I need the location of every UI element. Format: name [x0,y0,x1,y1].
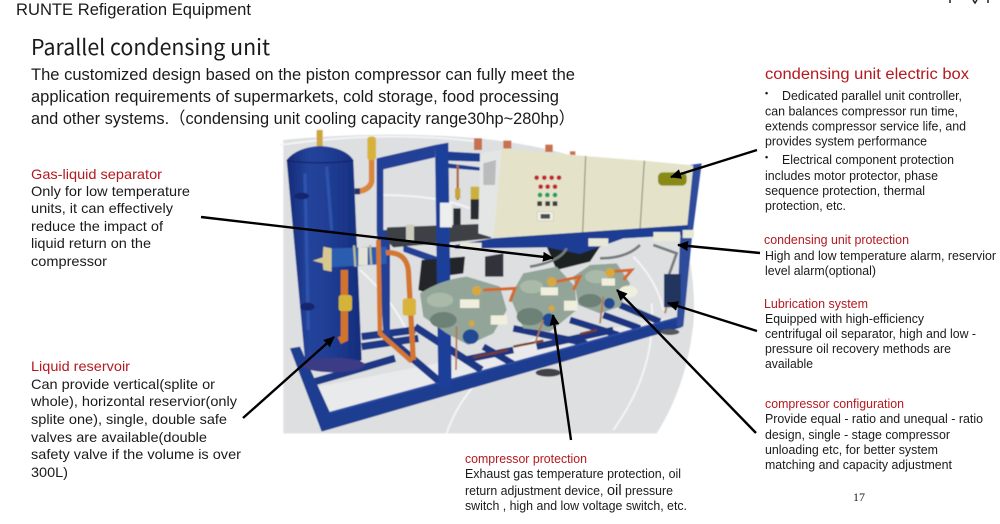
base frame front beam [290,317,682,432]
intro paragraph: The customized design based on the piston compressor can fully meet the [31,65,575,84]
arrow: electric box [671,150,757,177]
callout: condensing unit electric box: • [765,88,768,98]
callout: lubrication system [764,297,976,371]
callout: gas-liquid separator: liquid return on the [31,235,151,251]
photo backdrop [283,135,694,433]
callout: lubrication system: Lubrication system [764,297,868,311]
callout: condensing unit protection [764,233,996,278]
olive label [658,172,687,186]
callout: compressor protection: return adjustment device, oil pressure [465,482,673,499]
tank pipes and separator [357,138,372,192]
callout: gas-liquid separator: Gas-liquid separator [31,166,162,182]
callout: condensing unit electric box: Dedicated parallel unit controller, [782,89,962,103]
callout: condensing unit electric box: extends compressor service life, and [765,120,966,134]
equipment photo: parallel condensing unit [280,130,702,433]
callout: gas-liquid separator: reduce the impact of [31,218,163,234]
arrow: condensing unit protection [678,245,760,253]
callout: gas-liquid separator: compressor [31,253,107,269]
callout: compressor protection: compressor protection [465,452,587,466]
callout: lubrication system: Equipped with high-efficiency [765,312,925,326]
cropped marks at top right [950,0,988,3]
arrow: liquid reservoir [243,337,334,418]
upright [435,143,452,390]
callout: compressor configuration [765,397,983,472]
callout: condensing unit electric box: can balances compressor run time, [765,104,958,118]
arrow: gas-liquid separator [201,217,553,258]
callout: condensing unit electric box: protection, etc. [765,199,846,213]
callout: liquid reservoir: safety valve if the volume is over [31,446,241,462]
upper frame [377,145,435,337]
control panel lamps [534,175,561,189]
title: Parallel condensing unit [31,30,270,62]
callout: condensing unit electric box: sequence protection, thermal [765,184,925,198]
callout: liquid reservoir: valves are available(double [31,429,207,445]
callout: condensing unit electric box: provides system performance [765,134,927,148]
callout: compressor configuration: Provide equal - ratio and unequal - ratio [765,412,983,426]
callout: liquid reservoir: Can provide vertical(splite or [31,376,215,392]
right post [677,163,702,327]
callout: condensing unit protection: High and low temperature alarm, reservior [765,249,996,263]
callout: liquid reservoir: splite one), single, double safe [31,411,227,427]
base frame cross beams [463,305,660,365]
callout: condensing unit electric box: Electrical component protection [782,153,954,167]
liquid reservoir tank [287,146,362,367]
arrow: compressor configuration [617,290,756,433]
callout: compressor protection: Exhaust gas temperature protection, oil [465,467,681,481]
callout: compressor configuration: unloading etc, for better system [765,443,938,457]
intro paragraph: application requirements of supermarkets, cold storage, food processing [31,87,559,106]
intro paragraph [31,65,575,128]
callout: condensing unit electric box [765,66,969,213]
callout: compressor configuration: compressor configuration [765,397,904,411]
callout: compressor protection [465,452,687,513]
callout: liquid reservoir [30,358,241,480]
page number: 17 [853,490,865,504]
callout: liquid reservoir: 300L) [31,464,68,480]
header: company name: RUNTE Refigeration Equipment [16,1,251,19]
floor gaps [318,317,673,413]
callout: gas-liquid separator: units, it can effectively [31,200,173,216]
label sheet [440,203,452,227]
callout: liquid reservoir: whole), horizontal reservior(only [30,393,237,409]
callout: compressor configuration: matching and capacity adjustment [765,458,953,472]
arrow: lubrication system [668,303,757,331]
base frame back rails [315,327,482,383]
callout: condensing unit electric box: • [765,152,768,162]
oil separator panel [664,274,681,307]
callout: lubrication system: available [765,357,813,371]
callout: condensing unit electric box: includes motor protector, phase [765,169,938,183]
callout: liquid reservoir: Liquid reservoir [31,358,130,374]
callout: condensing unit electric box: condensing unit electric box [765,66,969,83]
callout: gas-liquid separator [31,166,190,269]
intro paragraph: and other systems.（condensing unit cooling capacity range30hp~280hp） [31,109,575,128]
callout: compressor configuration: design, single - stage compressor [765,428,950,442]
compressor pipes and fittings [483,270,632,302]
callout: lubrication system: centrifugal oil separator, high and low - [765,327,976,341]
arrow: compressor protection [553,315,571,440]
electric box [478,148,510,238]
callout: condensing unit protection: condensing unit protection [764,233,909,247]
top valve stubs [474,138,575,155]
callout: compressor protection: switch , high and low voltage switch, etc. [465,499,687,513]
beam under box [455,225,688,254]
insulated black pipes [471,199,479,219]
callout: lubrication system: pressure oil recovery methods are [765,342,951,356]
callout: gas-liquid separator: Only for low temperature [31,183,190,199]
callout: condensing unit protection: level alarm(optional) [765,264,876,278]
compressors [420,263,630,345]
